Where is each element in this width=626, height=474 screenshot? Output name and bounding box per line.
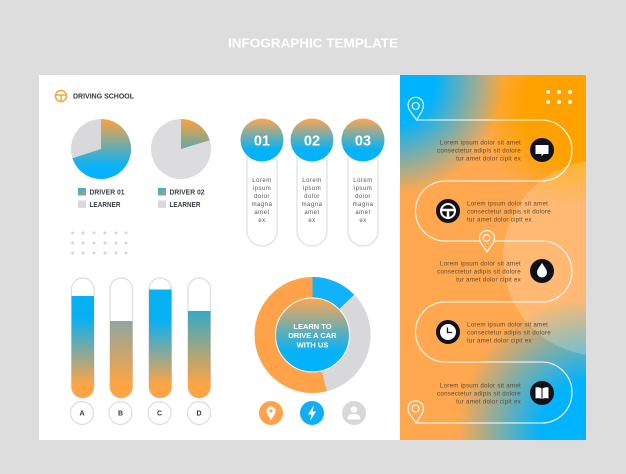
legend: pie 2: [158, 188, 205, 209]
card: 02: [290, 118, 334, 246]
card: 01: ipsum: [253, 186, 271, 192]
decorative dots: right panel: [546, 90, 572, 104]
legend: pie 1: LEARNER: [90, 202, 120, 209]
legend: pie 1: [78, 188, 125, 209]
bar chart: tubes A-D: [72, 278, 210, 398]
text: step 5: Lorem ipsum dolor sit amet: [440, 382, 521, 390]
text: step 5: consectetur adipis sit dolore: [437, 390, 521, 398]
card: 01: ex: [258, 218, 266, 224]
bar labels A-D: A: [79, 410, 85, 418]
bar labels A-D: B: [118, 410, 123, 418]
legend: pie 2: DRIVER 02: [170, 190, 205, 196]
card: 02: 02: [304, 134, 320, 150]
card: 01: [240, 118, 284, 246]
card: 01: amet: [254, 210, 270, 216]
text: step 4: Lorem ipsum dolor sit amet: [467, 322, 548, 328]
text: step 2: tur amet dolor cipit ex: [467, 216, 533, 224]
text: step 3: consectetur adipis sit dolore: [437, 268, 521, 276]
card: 02: amet: [304, 210, 320, 216]
text: step 3: tur amet dolor cipit ex: [456, 276, 522, 284]
text: step 3: Lorem ipsum dolor sit amet: [440, 260, 521, 268]
card: 03: ipsum: [354, 186, 372, 192]
card: 03: ex: [359, 218, 367, 224]
donut chart: WITH US: [297, 340, 328, 350]
text: step 1: tur amet dolor cipit ex: [456, 156, 522, 162]
panel: white left panel: [39, 75, 400, 440]
text: step 5: [437, 382, 522, 406]
text: step 4: [467, 322, 551, 344]
pie chart: driver 01: [71, 119, 131, 179]
icon: water drop: [530, 259, 554, 283]
icon: lightning: [300, 401, 324, 425]
card: 03: magna: [353, 202, 374, 208]
logo: driving school: DRIVING SCHOOL: [73, 92, 134, 100]
text: step 1: Lorem ipsum dolor sit amet: [440, 140, 521, 146]
card: 03: 03: [355, 134, 371, 150]
text: step 3: [437, 260, 522, 284]
bar labels A-D: [70, 402, 210, 424]
icon: book: [530, 381, 554, 405]
card: 02: dolor: [304, 194, 320, 200]
icon: location: [259, 401, 283, 425]
card: 01: 01: [254, 134, 270, 150]
card: 03: [342, 118, 384, 246]
card: 01: magna: [252, 202, 273, 208]
legend: pie 1: DRIVER 01: [90, 190, 125, 196]
card: 03: Lorem: [353, 178, 373, 184]
text: step 1: consectetur adipis sit dolore: [437, 148, 521, 154]
bar labels A-D: D: [196, 410, 202, 418]
panel: gradient right panel: [400, 75, 586, 440]
donut chart: [254, 277, 371, 393]
title: INFOGRAPHIC TEMPLATE: [228, 36, 398, 50]
route line: [416, 120, 572, 423]
text: step 4: consectetur adipis sit dolore: [467, 330, 551, 336]
text: step 1: [437, 140, 522, 162]
pin: middle: [480, 231, 494, 252]
text: step 2: consectetur adipis sit dolore: [467, 208, 551, 216]
icon: user: [342, 401, 366, 425]
card: 03: amet: [355, 210, 371, 216]
pie chart: driver 02: [151, 119, 211, 179]
card: 01: dolor: [254, 194, 270, 200]
logo: driving school: [56, 90, 134, 102]
donut chart: DRIVE A CAR: [288, 331, 337, 340]
text: step 2: [467, 200, 551, 224]
text: step 2: Lorem ipsum dolor sit amet: [467, 200, 548, 208]
card: 02: ipsum: [303, 186, 321, 192]
donut chart: LEARN TO: [293, 322, 332, 331]
card: 02: ex: [308, 218, 316, 224]
text: step 5: tur amet dolor cipit ex: [456, 398, 522, 406]
bar labels A-D: C: [157, 410, 162, 418]
card: 02: magna: [302, 202, 323, 208]
icon: chat: [530, 138, 554, 162]
legend: pie 2: LEARNER: [170, 202, 200, 209]
pin: start: [408, 97, 423, 120]
pin: end: [408, 401, 423, 423]
card: 02: Lorem: [302, 178, 322, 184]
text: step 4: tur amet dolor cipit ex: [467, 338, 533, 344]
icon: steering wheel: [436, 199, 460, 223]
card: 03: dolor: [355, 194, 371, 200]
icon: clock: [436, 320, 460, 344]
card: 01: Lorem: [252, 178, 272, 184]
